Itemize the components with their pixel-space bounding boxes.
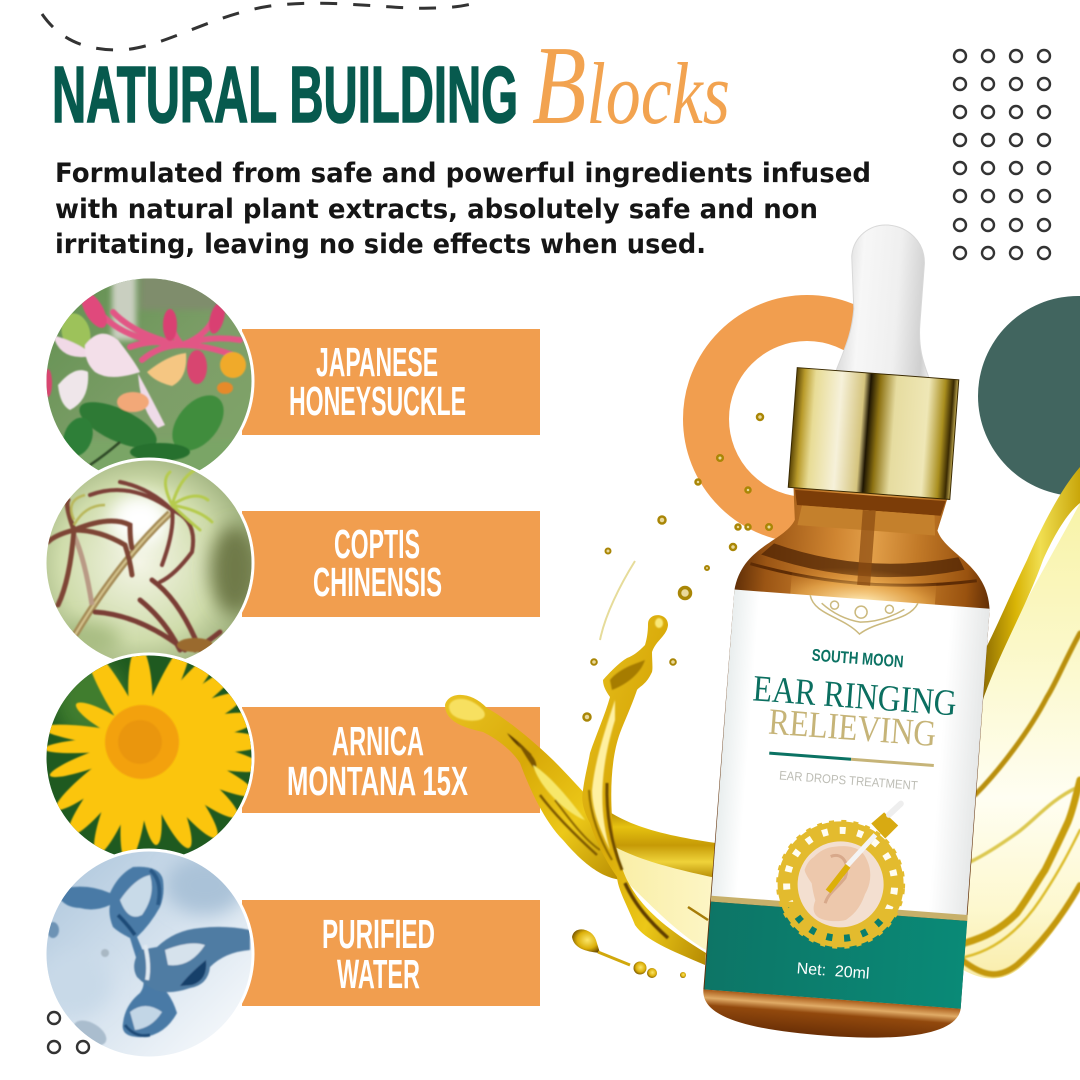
orange ring xyxy=(706,318,908,520)
pale oil sheet right xyxy=(955,503,1080,979)
oil tail detail xyxy=(449,699,600,855)
label bar: purified water: WATER xyxy=(337,951,420,997)
label bar: arnica montana: ARNICA xyxy=(332,718,424,764)
oil splash xyxy=(445,414,1080,979)
oil upright splash xyxy=(582,615,706,965)
dot grid bottom left xyxy=(48,1012,89,1053)
label bar: purified water: PURIFIED xyxy=(322,911,435,957)
net volume: Net: 20ml xyxy=(796,960,870,983)
photo circle: arnica xyxy=(46,652,254,854)
label bar: japanese honeysuckle: JAPANESE xyxy=(316,339,438,385)
gold collar xyxy=(788,368,959,499)
small droplets xyxy=(584,414,772,720)
title xyxy=(52,24,730,148)
dropper bulb xyxy=(836,222,940,378)
treatment caption: EAR DROPS TREATMENT xyxy=(779,768,919,793)
white label xyxy=(711,590,990,920)
label bar: coptis chinensis: COPTIS xyxy=(334,521,420,567)
label bar: coptis chinensis: CHINENSIS xyxy=(313,559,442,605)
label rule xyxy=(769,752,934,767)
bottle xyxy=(703,224,990,1038)
decorative dashed curve xyxy=(42,3,475,50)
teal circle xyxy=(978,296,1080,496)
label bar: coptis chinensis xyxy=(242,511,540,617)
product subtitle: RELIEVING xyxy=(767,702,938,755)
oil gold lines right xyxy=(962,633,1080,974)
intro text block xyxy=(55,158,871,260)
label bar: purified water xyxy=(242,900,540,1006)
upright splash detail xyxy=(589,618,668,938)
intro text block: Formulated from safe and powerful ingredients infused xyxy=(55,158,871,189)
bottle glass xyxy=(703,481,999,1009)
photo circle: coptis xyxy=(46,458,254,659)
intro text block: irritating, leaving no side effects when used. xyxy=(55,229,706,260)
photo circle: honeysuckle xyxy=(46,278,254,470)
product name: EAR RINGING xyxy=(752,668,958,724)
label bar: arnica montana xyxy=(242,707,540,813)
dot grid top right xyxy=(954,50,1050,259)
intro text block: with natural plant extracts, absolutely safe and non xyxy=(55,194,818,225)
title: Blocks xyxy=(532,24,730,148)
label bar: arnica montana: MONTANA 15X xyxy=(287,758,468,804)
oil drop lower left xyxy=(572,929,686,978)
teal band xyxy=(704,896,968,1009)
brand name: SOUTH MOON xyxy=(811,646,904,671)
photo circle: water xyxy=(40,848,260,1063)
oil band to bottle xyxy=(600,805,716,878)
bottle base xyxy=(701,989,961,1046)
label ornament xyxy=(808,595,918,638)
oil tail from left drop xyxy=(445,695,625,880)
thin spray arc xyxy=(600,561,635,640)
ear medallion xyxy=(774,795,909,951)
shoulder shading xyxy=(748,487,983,611)
title: NATURAL BUILDING xyxy=(52,50,518,139)
pale oil sheet left xyxy=(615,845,716,950)
label bar: japanese honeysuckle xyxy=(242,329,540,435)
oil gold band right xyxy=(981,467,1080,705)
label bar: japanese honeysuckle: HONEYSUCKLE xyxy=(289,378,466,424)
